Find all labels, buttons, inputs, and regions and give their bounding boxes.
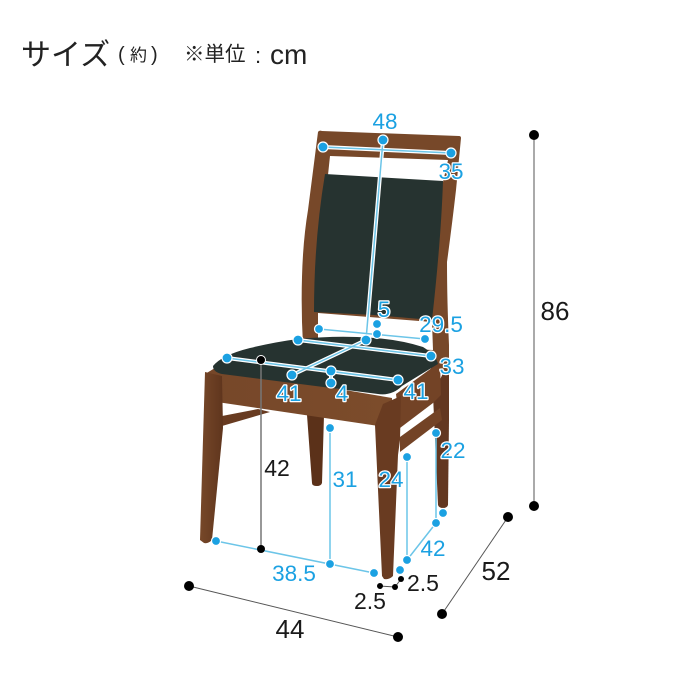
blue dimension labels: 41 bbox=[403, 379, 429, 404]
rear left leg bbox=[307, 415, 324, 486]
rear right leg bbox=[433, 360, 449, 508]
title: 約 bbox=[130, 46, 147, 65]
black dimension labels bbox=[264, 296, 569, 644]
title: ( bbox=[118, 44, 125, 66]
title: サイズ bbox=[21, 39, 110, 72]
blue dimension labels: 41 bbox=[276, 381, 302, 406]
black dimension labels: 2.5 bbox=[407, 570, 439, 596]
blue dimension labels: 31 bbox=[332, 467, 358, 492]
black dimension labels: 44 bbox=[276, 614, 304, 644]
blue dimension labels: 5 bbox=[378, 297, 390, 322]
black dimension labels: 2.5 bbox=[354, 588, 386, 614]
black dots bbox=[184, 130, 539, 642]
blue dimension labels: 33 bbox=[439, 354, 465, 379]
front left leg bbox=[200, 372, 223, 543]
front apron bbox=[205, 368, 392, 428]
black dimension labels: 42 bbox=[264, 455, 290, 481]
blue dimension labels: 4 bbox=[336, 381, 348, 406]
title: cm bbox=[270, 39, 307, 70]
chair back frame bbox=[302, 131, 461, 372]
seat side apron bbox=[396, 362, 441, 428]
black dimension labels: 52 bbox=[482, 556, 510, 586]
blue dimension labels: 24 bbox=[378, 467, 404, 492]
front left stretcher bbox=[222, 409, 270, 426]
chair illustration bbox=[200, 131, 461, 579]
title: ※単位 bbox=[184, 43, 246, 66]
right stretcher bbox=[400, 408, 442, 452]
blue dimension labels: 48 bbox=[372, 109, 398, 134]
blue dots bbox=[212, 135, 456, 578]
back upper opening bbox=[328, 156, 448, 182]
title bbox=[21, 39, 307, 72]
blue dimension labels: 29.5 bbox=[419, 312, 463, 337]
blue dimension labels: 35 bbox=[438, 159, 464, 184]
blue dimension labels: 22 bbox=[440, 438, 466, 463]
title: : bbox=[255, 43, 261, 68]
blue dimension labels: 38.5 bbox=[272, 561, 316, 586]
title: ) bbox=[151, 44, 158, 66]
lower back opening bbox=[318, 313, 433, 350]
seat cushion bbox=[213, 337, 438, 394]
blue dimension labels bbox=[272, 109, 466, 586]
blue dimension lines bbox=[216, 140, 451, 573]
black dimension labels: 86 bbox=[541, 296, 569, 326]
blue dimension line halos bbox=[227, 140, 451, 383]
front right leg bbox=[375, 396, 401, 579]
blue dimension labels: 42 bbox=[420, 536, 446, 561]
black dimension lines bbox=[189, 135, 534, 637]
back cushion bbox=[314, 174, 443, 320]
